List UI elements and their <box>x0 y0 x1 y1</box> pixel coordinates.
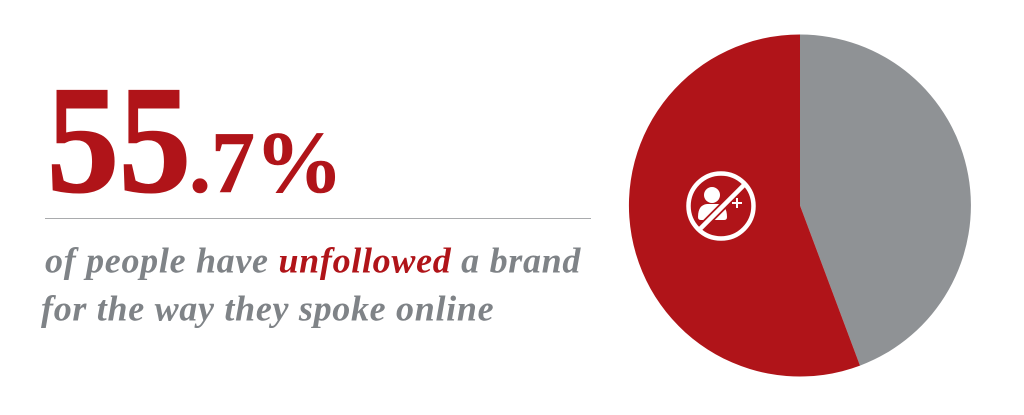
description text: for the way they spoke online <box>41 288 494 328</box>
icon: unfollow person <box>688 174 754 238</box>
red slice: 55.7% <box>629 34 860 376</box>
grey slice <box>800 34 971 366</box>
pie chart <box>629 34 971 376</box>
headline statistic: 55.7% <box>47 56 343 225</box>
description text <box>41 240 581 328</box>
divider line <box>45 218 591 219</box>
headline statistic: 55.7%: 55 <box>47 56 191 225</box>
headline statistic: 55.7%: .7% <box>189 115 343 212</box>
description text: of people have unfollowed a brand <box>45 240 581 280</box>
